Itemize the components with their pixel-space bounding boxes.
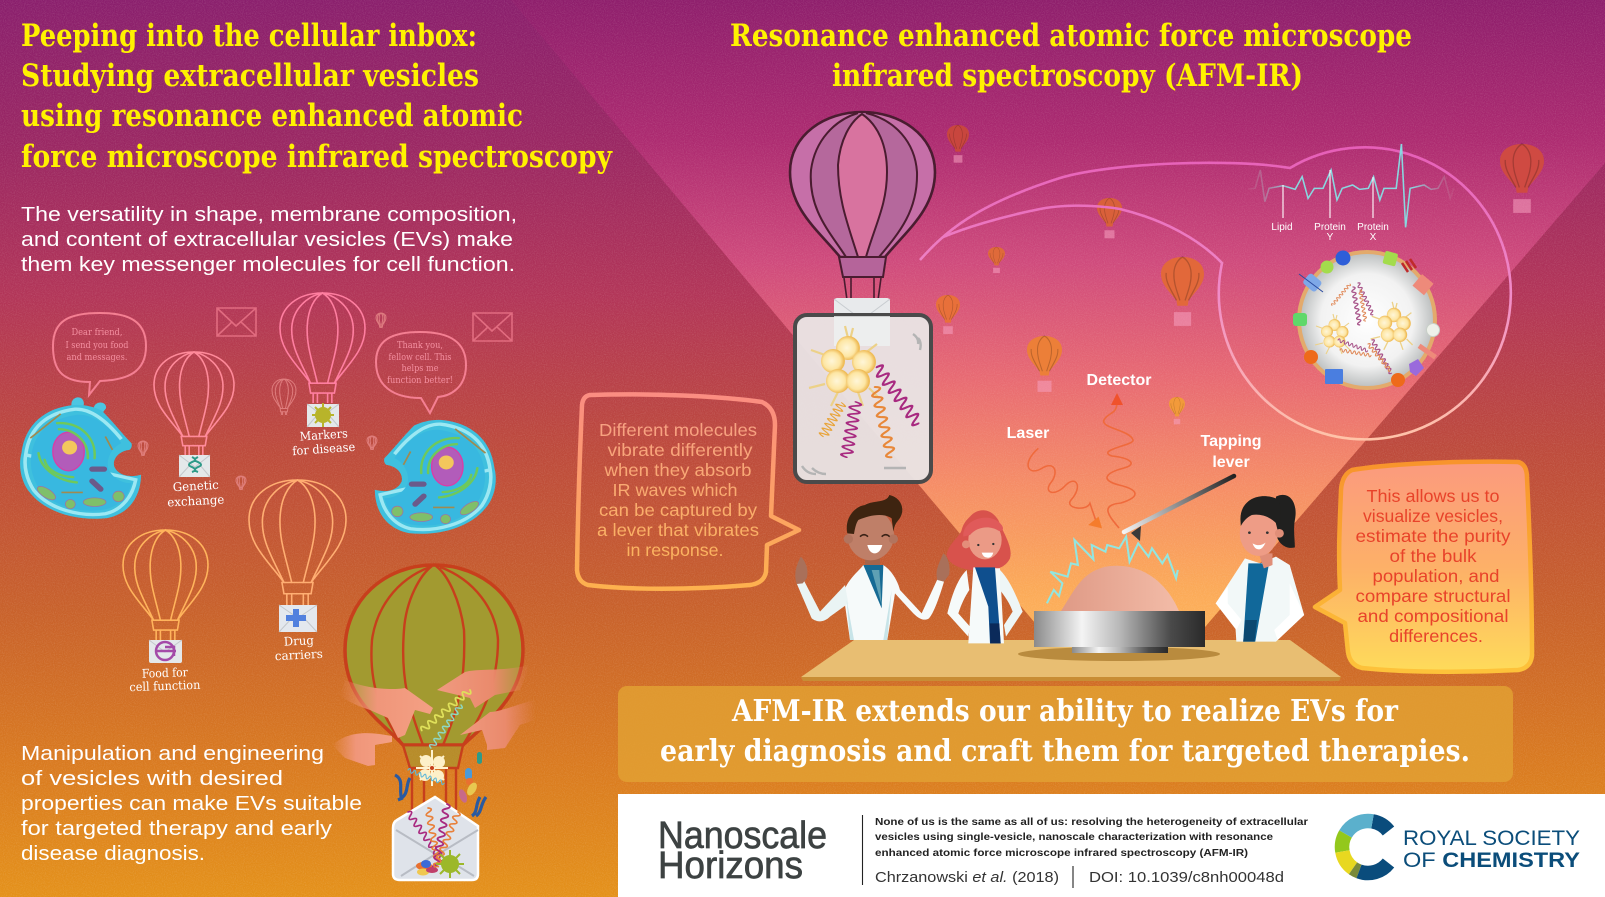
callout: right xyxy=(1315,462,1532,672)
manipulation text: of vesicles with desired xyxy=(21,767,283,790)
balloon: food for cell function: cell function xyxy=(129,678,201,694)
speech bubble: left cell: Dear friend, xyxy=(72,327,122,338)
scientist: woman black hair xyxy=(1216,495,1304,642)
envelopes faint xyxy=(217,308,512,341)
footer xyxy=(618,794,1605,897)
intro text xyxy=(21,203,517,276)
speech bubble: right cell xyxy=(376,332,466,413)
callout: left: IR waves which xyxy=(612,480,738,500)
left title: Studying extracellular vesicles xyxy=(21,58,479,94)
manipulation text xyxy=(21,742,362,865)
card xyxy=(795,315,931,482)
spotlight cone xyxy=(511,0,1605,627)
callout: right: This allows us to xyxy=(1366,486,1500,506)
label: detector: Detector xyxy=(1087,372,1151,389)
hanging card with balloon: EV illustration xyxy=(790,112,935,482)
speech bubble: left cell: I send you food xyxy=(66,340,128,351)
table xyxy=(801,640,1341,681)
journal logo xyxy=(658,815,827,887)
small coloured balloons xyxy=(936,125,1544,424)
intro text: them key messenger molecules for cell function. xyxy=(21,253,515,276)
speech bubble: left cell: and messages. xyxy=(66,352,128,363)
balloon: drug carriers xyxy=(249,480,346,663)
speech bubble: right cell: function better! xyxy=(387,375,453,386)
IR spectrum: Lipid xyxy=(1271,222,1293,233)
label: tapping lever: Tapping xyxy=(1200,433,1262,450)
IR spectrum: Protein xyxy=(1357,222,1389,233)
callout: right: differences. xyxy=(1389,626,1483,646)
callout: left: Different molecules xyxy=(599,420,757,440)
callout: left xyxy=(577,394,799,589)
DNA and molecules xyxy=(395,688,486,816)
right title xyxy=(730,18,1412,94)
callout: left: when they absorb xyxy=(603,460,752,480)
vesicle contents xyxy=(1315,302,1413,354)
RSC wordmark: ROYAL SOCIETY xyxy=(1403,827,1580,850)
cell: right xyxy=(375,420,496,534)
balloon: genetic exchange: exchange xyxy=(167,493,225,509)
stage xyxy=(1034,611,1205,653)
RSC wordmark xyxy=(1403,827,1580,872)
lipid tails xyxy=(819,364,922,458)
journal logo: Horizons xyxy=(658,845,803,887)
conclusion banner: early diagnosis and craft them for targeted therapies. xyxy=(660,734,1470,769)
callout: left: can be captured by xyxy=(599,500,757,520)
paper reference: enhanced atomic force microscope infrared spectroscopy (AFM-IR) xyxy=(875,848,1248,859)
open envelope xyxy=(393,797,478,880)
balloon: drug carriers: carriers xyxy=(274,647,323,663)
intro text: and content of extracellular vesicles (EVs) make xyxy=(21,228,513,251)
balloon: food for cell function: Food for xyxy=(142,665,188,681)
manipulation text: disease diagnosis. xyxy=(21,842,205,865)
balloon: drug carriers: Drug xyxy=(283,633,314,649)
speech bubble: right cell: Thank you, xyxy=(397,340,443,351)
journal logo: Nanoscale xyxy=(658,815,827,857)
IR spectrum: Protein xyxy=(1314,222,1346,233)
balloon: markers for disease xyxy=(280,293,365,458)
conclusion banner: AFM-IR extends our ability to realize EVs for xyxy=(731,694,1399,729)
left title: using resonance enhanced atomic xyxy=(21,98,523,134)
citation: DOI: 10.1039/c8nh00048d xyxy=(1089,869,1284,886)
callout: right: and compositional xyxy=(1358,606,1508,626)
callout: right: compare structural xyxy=(1356,586,1510,606)
callout: left: in response. xyxy=(626,540,724,560)
left title: Peeping into the cellular inbox: xyxy=(21,18,477,54)
RSC logo xyxy=(1342,821,1388,873)
callout loop to vesicle xyxy=(920,147,1511,439)
label: laser: Laser xyxy=(1007,425,1049,442)
explosion of EVs xyxy=(416,750,448,786)
cell: left xyxy=(20,397,141,519)
speech bubble: left cell xyxy=(53,313,146,395)
balloon: markers for disease: for disease xyxy=(292,440,356,458)
scientist: man xyxy=(795,495,950,640)
detector wave arrow xyxy=(1104,393,1135,528)
scientist: woman red hair xyxy=(947,510,1023,643)
IR spectrum: X xyxy=(1370,232,1377,243)
vesicle xyxy=(1293,250,1440,390)
callout: right: population, and xyxy=(1372,566,1500,586)
paper reference: None of us is the same as all of us: resolving the heterogeneity of extracellular xyxy=(875,817,1308,828)
dome sample xyxy=(1061,566,1179,611)
small outline balloons xyxy=(138,313,386,490)
EV cluster xyxy=(809,326,879,406)
conclusion banner xyxy=(618,686,1513,782)
hands xyxy=(340,680,433,738)
citation xyxy=(875,869,1284,886)
membrane proteins xyxy=(1293,250,1440,387)
balloon: genetic exchange: Genetic xyxy=(172,478,219,494)
paper reference xyxy=(875,817,1308,859)
callout: right: estimate the purity xyxy=(1356,526,1511,546)
speech bubble: right cell: fellow cell. This xyxy=(388,352,452,363)
right title: Resonance enhanced atomic force microscope xyxy=(730,18,1412,54)
label: tapping lever: lever xyxy=(1212,454,1250,471)
RSC wordmark: OF CHEMISTRY xyxy=(1403,849,1580,872)
callout: left: a lever that vibrates xyxy=(597,520,759,540)
balloon: genetic exchange xyxy=(154,352,234,509)
paper reference: vesicles using single-vesicle, nanoscale characterization with resonance xyxy=(875,832,1273,843)
manipulation text: for targeted therapy and early xyxy=(21,817,333,840)
callout: right: of the bulk xyxy=(1390,546,1477,566)
callout: left: vibrate differently xyxy=(608,440,753,460)
speech bubble: right cell: helps me xyxy=(402,363,439,374)
callout: right: visualize vesicles, xyxy=(1363,506,1503,526)
IR spectrum xyxy=(1248,144,1454,243)
balloon: food for cell function xyxy=(123,530,208,694)
left title: force microscope infrared spectroscopy xyxy=(21,139,613,175)
manipulation text: properties can make EVs suitable xyxy=(21,792,362,815)
vibration zigzag xyxy=(1047,537,1178,603)
pink balloon xyxy=(790,112,935,300)
laser wave arrow xyxy=(1028,448,1102,528)
manipulation text: Manipulation and engineering xyxy=(21,742,324,765)
intro text: The versatility in shape, membrane composition, xyxy=(21,203,517,226)
right title: infrared spectroscopy (AFM-IR) xyxy=(832,58,1303,94)
IR spectrum: Y xyxy=(1327,232,1334,243)
citation: Chrzanowski et al. (2018) xyxy=(875,869,1059,886)
balloon: markers for disease: Markers xyxy=(299,426,348,444)
large balloon being filled xyxy=(332,565,535,880)
tapping lever xyxy=(1124,476,1234,541)
left title xyxy=(21,18,613,175)
